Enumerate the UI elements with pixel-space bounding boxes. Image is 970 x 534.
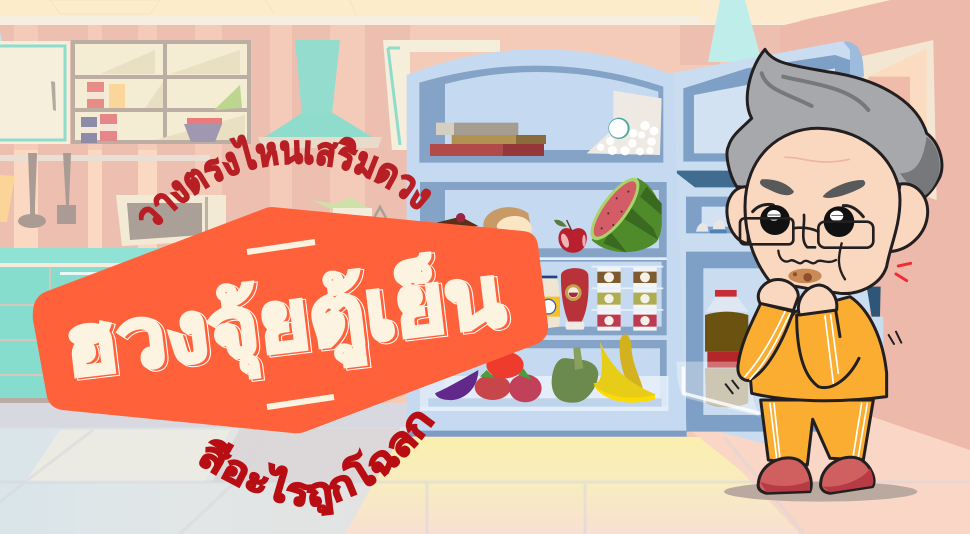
kitchen counter and drawers — [0, 248, 200, 403]
title: ฮวงจุ้ยตู้เย็น — [59, 244, 510, 400]
right wall picture frame — [860, 40, 937, 200]
torso and arms — [738, 297, 887, 401]
door shelf bottle — [677, 290, 760, 417]
lower compartment and tray — [420, 340, 668, 411]
shadow — [724, 482, 917, 502]
character — [724, 49, 942, 502]
chocolate cake — [437, 213, 478, 230]
top compartment — [419, 66, 663, 163]
title: ฮวงจุ้ยตู้เย็น — [62, 246, 513, 401]
glasses — [740, 218, 873, 248]
bag of sugar — [587, 91, 662, 155]
wrinkles and brows — [760, 157, 865, 198]
ears — [727, 184, 928, 252]
badge — [33, 207, 548, 433]
nose — [803, 215, 815, 247]
motion marks — [726, 263, 911, 393]
mouth — [778, 243, 845, 279]
bell pepper — [552, 347, 598, 403]
eggplant — [435, 370, 478, 400]
window behind fridge — [383, 40, 500, 150]
bread — [483, 207, 532, 233]
utensil rail and tools — [0, 153, 210, 228]
hair — [727, 49, 942, 202]
middle compartments — [420, 182, 667, 335]
cookie crumbs — [788, 269, 822, 283]
pants — [761, 400, 873, 465]
yogurt cups — [592, 267, 663, 331]
curved heading top: วางตรงไหนเสริมดวง — [138, 134, 432, 226]
apple — [554, 220, 587, 253]
bananas — [593, 334, 655, 403]
floor — [0, 403, 970, 534]
open fridge door — [670, 42, 883, 443]
badge rule top — [247, 242, 315, 252]
hands — [758, 280, 837, 315]
badge rule bottom — [267, 397, 334, 407]
cooker hood — [258, 40, 382, 148]
title: ฮวงจุ้ยตู้เย็น — [62, 246, 513, 401]
curved heading bottom: สีอะไรถูกโฉลก — [199, 412, 436, 516]
watermelon — [582, 171, 662, 253]
kettle — [312, 197, 386, 218]
mayonnaise bottle — [541, 276, 560, 328]
ketchup bottle — [561, 268, 589, 330]
fridge body — [407, 49, 687, 437]
microwave — [116, 195, 226, 246]
open shelves — [71, 40, 251, 144]
eyes — [753, 204, 863, 237]
upper cabinet left door — [0, 41, 70, 144]
stacked books — [430, 123, 546, 156]
tomatoes — [475, 352, 542, 402]
shoes — [758, 457, 874, 493]
head — [745, 128, 900, 294]
